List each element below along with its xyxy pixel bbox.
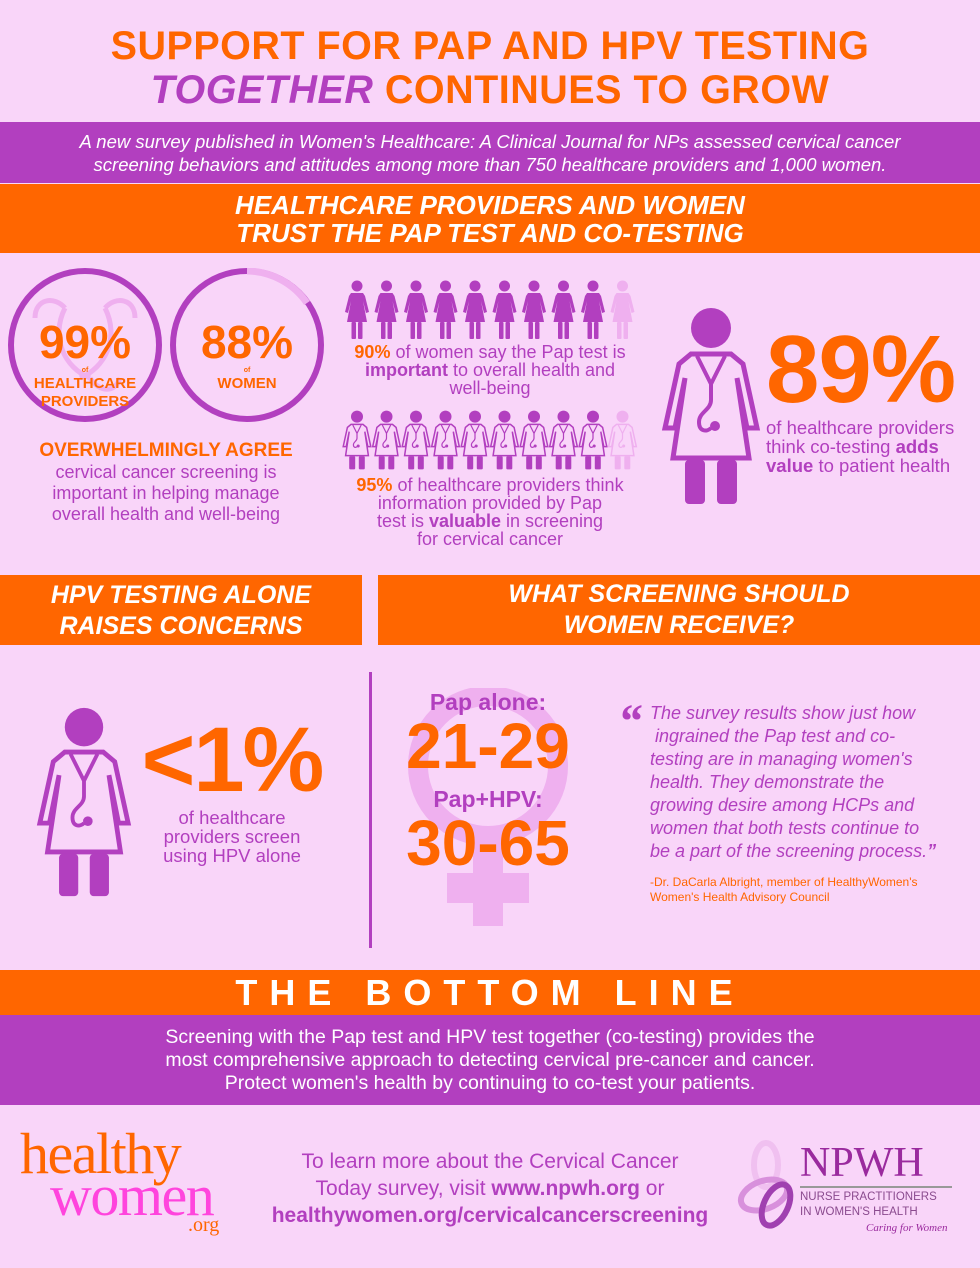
- quote: ingrained the Pap test and co-: [655, 726, 895, 746]
- quote: be a part of the screening process.”: [650, 841, 936, 861]
- logo: NPWH: IN WOMEN'S HEALTH: [800, 1206, 918, 1218]
- 89% stat: of healthcare providers: [766, 417, 954, 438]
- icon: doctor HPV: [36, 708, 132, 896]
- <1% stat: using HPV alone: [163, 845, 301, 866]
- bottom line header: THE BOTTOM LINE: [235, 972, 745, 1013]
- section header: HPV alone: [0, 575, 362, 645]
- intro band: A new survey published in Women's Healthcare: A Clinical Journal for NPs assessed cervical cancer: [80, 131, 900, 152]
- icon: female symbol with ages: [406, 688, 570, 926]
- title: TOGETHER CONTINUES TO GROW: [151, 68, 829, 112]
- agree text: important in helping manage: [52, 483, 280, 503]
- quote: growing desire among HCPs and: [650, 795, 914, 815]
- bottom line text: most comprehensive approach to detecting cervical pre-cancer and cancer.: [165, 1049, 815, 1071]
- 88%: 88%: [201, 316, 293, 368]
- logo: NPWH: NPWH: [800, 1140, 924, 1186]
- 89% stat: 89%: [766, 316, 955, 423]
- quote: The survey results show just how: [650, 703, 915, 723]
- women pictogram 90%: [345, 280, 634, 398]
- title: [111, 24, 869, 112]
- agree text: overall health and well-being: [52, 504, 280, 524]
- logo: NPWH: NURSE PRACTITIONERS: [800, 1191, 937, 1203]
- <1% stat: <1%: [142, 709, 322, 811]
- doctors pictogram 95%: test is valuable in screening: [377, 511, 603, 531]
- logo: healthywomen: .org: [188, 1214, 219, 1236]
- logo: healthywomen: healthy: [20, 1121, 180, 1186]
- logo: healthywomen: [20, 1121, 219, 1236]
- 88%: WOMEN: [217, 375, 277, 392]
- <1% stat: providers screen: [164, 826, 300, 847]
- icon: big doctor: [662, 308, 760, 504]
- 89% stat: think co-testing adds: [766, 436, 939, 457]
- ages text: 30-65: [406, 807, 570, 879]
- footer text: healthywomen.org/cervicalcancerscreening: [272, 1204, 708, 1227]
- section header: HPV alone: RAISES CONCERNS: [59, 612, 303, 640]
- 99%: PROVIDERS: [41, 393, 129, 410]
- ages text: 21-29: [406, 710, 570, 782]
- footer text: Today survey, visit www.npwh.org or: [316, 1177, 664, 1200]
- intro band: [0, 122, 980, 183]
- doctors pictogram 95%: 95% of healthcare providers think: [356, 475, 624, 495]
- ages text: Pap+HPV:: [433, 786, 543, 812]
- title: SUPPORT FOR PAP AND HPV TESTING: [111, 24, 869, 68]
- footer text: To learn more about the Cervical Cancer: [301, 1150, 678, 1173]
- quote: Women's Health Advisory Council: [650, 890, 829, 904]
- section header: HPV alone: HPV TESTING ALONE: [51, 581, 311, 609]
- section header: trust: [0, 184, 980, 253]
- 88%: [201, 316, 293, 392]
- section header: trust: TRUST THE PAP TEST AND CO-TESTING: [236, 218, 744, 248]
- bottom line text: Screening with the Pap test and HPV test together (co-testing) provides the: [165, 1026, 815, 1048]
- agree text: OVERWHELMINGLY AGREE: [39, 440, 293, 461]
- women pictogram 90%: 90% of women say the Pap test is: [354, 342, 626, 362]
- section header: what screening: [378, 575, 980, 645]
- quote: “: [618, 695, 642, 748]
- ages text: Pap alone:: [430, 689, 546, 715]
- bottom line text: Protect women's health by continuing to co-test your patients.: [225, 1072, 755, 1094]
- doctors pictogram 95%: information provided by Pap: [378, 493, 602, 513]
- bottom line header: [0, 970, 980, 1015]
- section header: what screening: WHAT SCREENING SHOULD: [508, 580, 850, 608]
- doctors pictogram 95%: for cervical cancer: [417, 529, 563, 549]
- stat circles: [8, 268, 324, 524]
- agree text: [39, 440, 293, 524]
- 99%: of: [82, 367, 88, 374]
- quote: [618, 695, 936, 904]
- 88%: of: [244, 367, 250, 374]
- intro band: screening behaviors and attitudes among more than 750 healthcare providers and 1,000 women.: [94, 154, 886, 175]
- quote: testing are in managing women's: [650, 749, 913, 769]
- logo: healthywomen: women: [50, 1163, 213, 1228]
- section header: trust: HEALTHCARE PROVIDERS AND WOMEN: [235, 190, 745, 220]
- <1% stat: of healthcare: [179, 807, 285, 828]
- <1% stat: [142, 709, 322, 866]
- women pictogram 90%: well-being: [449, 378, 531, 398]
- section header: what screening: WOMEN RECEIVE?: [564, 611, 794, 639]
- 99%: 99%: [39, 316, 131, 368]
- 89% stat: [766, 316, 955, 476]
- quote: -Dr. DaCarla Albright, member of HealthyWomen's: [650, 875, 918, 889]
- logo: NPWH: Caring for Women: [866, 1222, 948, 1234]
- agree text: cervical cancer screening is: [55, 462, 277, 482]
- doctors pictogram 95%: [342, 410, 638, 549]
- footer text: [272, 1150, 708, 1227]
- 99%: HEALTHCARE: [34, 375, 136, 392]
- logo: NPWH: [738, 1140, 952, 1234]
- ages text: [406, 689, 570, 879]
- quote: health. They demonstrate the: [650, 772, 884, 792]
- women pictogram 90%: important to overall health and: [365, 360, 615, 380]
- quote: women that both tests continue to: [650, 818, 919, 838]
- 99%: [34, 316, 136, 410]
- bottom line text: [0, 1015, 980, 1105]
- 89% stat: value to patient health: [766, 455, 950, 476]
